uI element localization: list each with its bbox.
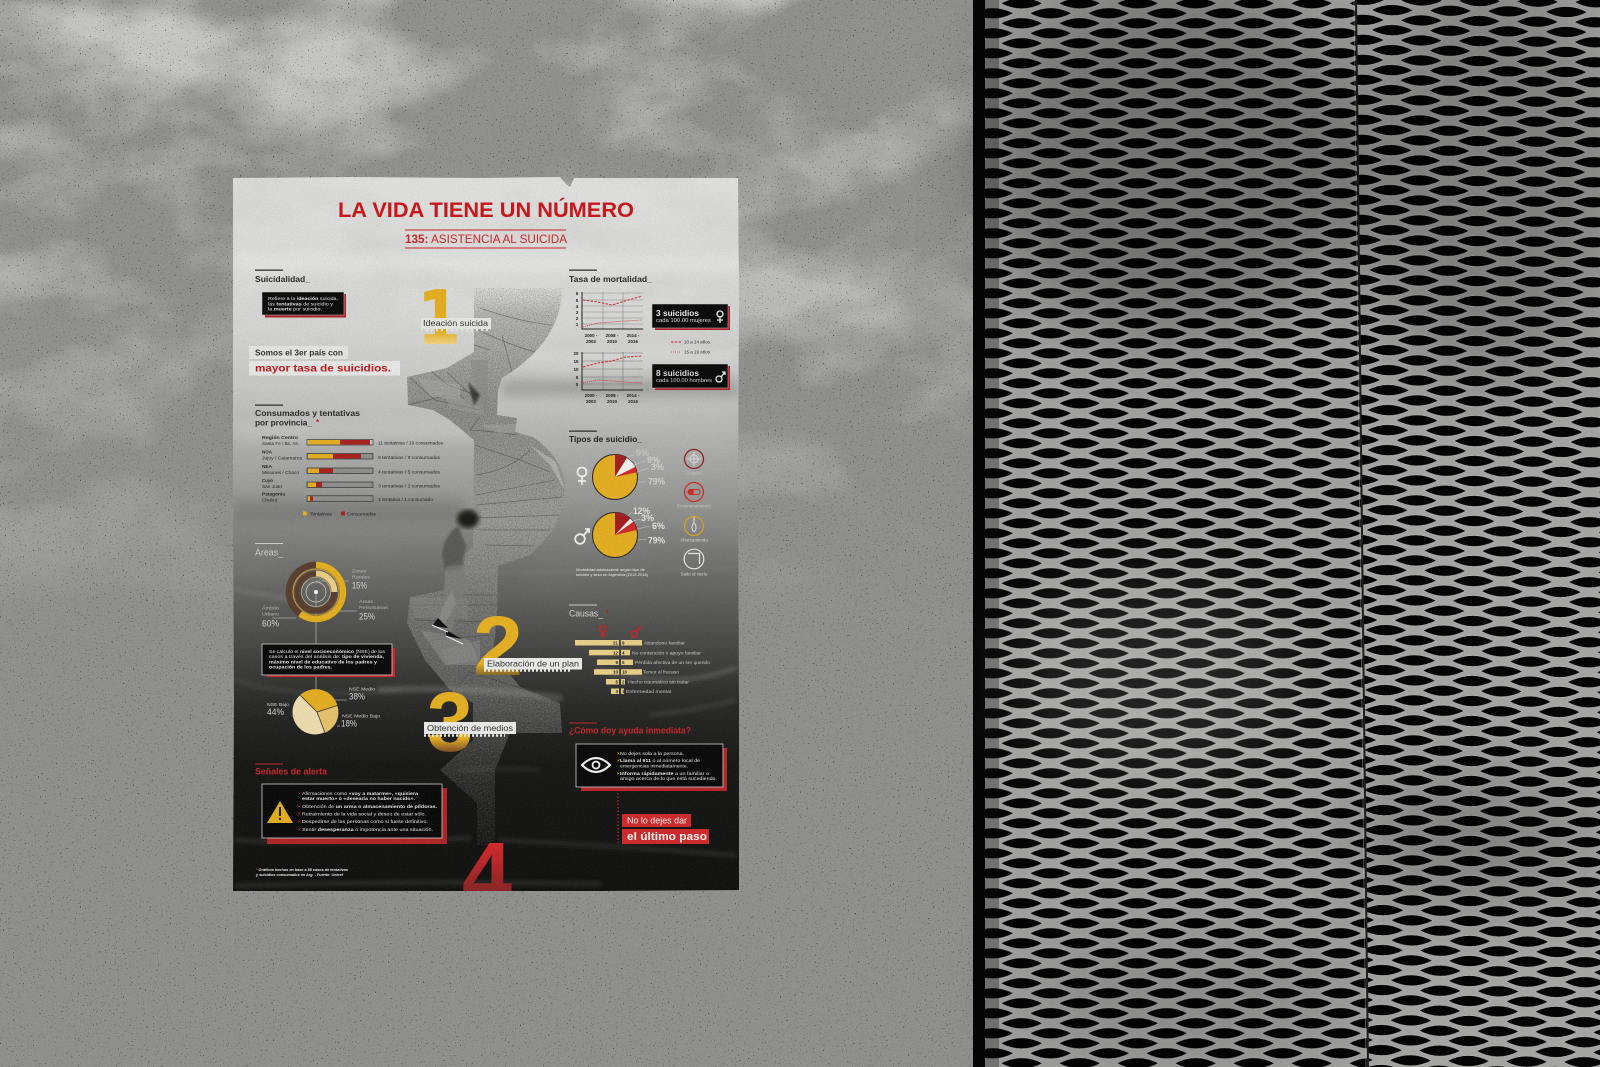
labels: áreas: Rurales <box>352 574 371 580</box>
poster background gradient <box>230 170 745 895</box>
step 3: obtención de medios <box>424 675 516 769</box>
line chart: mujeres: 2014 - <box>627 333 640 338</box>
pie chart: hombres <box>575 506 665 558</box>
caption: mortalidad adolescente: suicidio y sexo en Argentina (2012-2016) <box>576 572 649 577</box>
step 3: obtención de medios: Obtención de medios <box>427 723 513 733</box>
line chart: mujeres: 6 <box>576 291 579 296</box>
diverging bars: causas: 12 <box>613 650 618 655</box>
panel: suicidalidad <box>255 270 346 318</box>
bar chart: provincias: 1 tentativa / 1 consumado <box>378 497 434 502</box>
steps lit faces <box>419 378 460 398</box>
line chart: mujeres: 2000 - <box>585 333 598 338</box>
title: LA VIDA TIENE UN NÚMERO <box>338 198 634 222</box>
subtitle: 135: ASISTENCIA AL SUICIDA <box>405 232 567 246</box>
labels: áreas: Urbano <box>262 612 279 618</box>
pie chart: hombres: 3% <box>641 513 654 523</box>
list: acciones: Informa rápidamente a un familiar o <box>620 771 710 776</box>
box: 8 suicidios hombres: 8 suicidios <box>656 368 699 378</box>
diverging bars: causas: 1 <box>622 689 625 694</box>
bar chart: provincias: Misiones / Chaco <box>262 470 300 475</box>
sky clouds and horizon bands <box>233 373 738 522</box>
line chart: mujeres: 5 <box>576 298 579 303</box>
step 2: elaboración de un plan <box>473 599 582 693</box>
icon: envenenamiento: Envenenamiento <box>677 504 711 508</box>
spiral staircase <box>400 285 570 850</box>
step 2: elaboración de un plan: 2 <box>473 599 523 693</box>
diverging bars: causas: 21 <box>613 640 618 646</box>
line chart: hombres: 2014 - <box>627 393 640 398</box>
list: acciones: × <box>617 771 620 776</box>
diverging bars: causas: 4 <box>622 650 625 655</box>
labels: NSE <box>267 686 380 728</box>
legend: grupos de edad <box>671 340 711 354</box>
callout: no lo dejes dar: el último paso <box>627 831 707 843</box>
diverging bars: causas: Pérdida afectiva de un ser querido <box>635 660 710 666</box>
line chart: mujeres: 2010 <box>607 339 618 344</box>
diverging bars: causas: 5 <box>622 660 625 665</box>
labels: NSE: 38% <box>349 692 365 702</box>
line chart: hombres: 15 <box>573 359 579 364</box>
leader lines <box>272 581 357 690</box>
list: acciones: No dejes sola a la persona. <box>620 751 684 756</box>
footnote: * Gráficos hechos en base a 55 casos de tentativas <box>256 867 349 872</box>
box: 8 suicidios hombres <box>652 364 730 390</box>
line chart: hombres <box>573 351 643 404</box>
line chart: hombres: 2000 - <box>585 393 598 398</box>
panel: causas <box>569 604 710 695</box>
line chart: mujeres: 2016 <box>628 339 639 344</box>
paint streaks <box>236 568 735 886</box>
pie chart: mujeres: 3% <box>651 462 664 472</box>
panel: consumados y tentativas: Consumados y tentativas <box>255 408 360 418</box>
labels: NSE: NSE Bajo <box>267 702 289 708</box>
pie chart: NSE <box>292 689 338 734</box>
pie chart: mujeres <box>578 448 665 500</box>
pie chart: mujeres: 9% <box>636 448 649 458</box>
list: señales: Obtención de un arma o almacenamiento de píldoras. <box>302 804 437 810</box>
panel: consumados y tentativas: por provincia_ <box>255 418 312 428</box>
labels: áreas: 15% <box>352 580 367 590</box>
panel: consumados y tentativas: * <box>316 418 320 427</box>
pie chart: hombres: 79% <box>648 536 665 546</box>
panel: ayuda inmediata: ¿Cómo doy ayuda inmediata? <box>569 726 691 736</box>
panel: señales de alerta: Señales de alerta <box>255 766 327 776</box>
line chart: mujeres: 3 <box>576 310 579 315</box>
labels: NSE: NSE Medio <box>349 686 375 692</box>
box: nivel socioeconómico: Se calculó el nivel socioeconómico (NSE) de los <box>269 649 386 654</box>
box: nivel socioeconómico: casos a través del análisis de: tipo de vivienda, <box>269 654 384 659</box>
line chart: hombres: 2016 <box>628 399 639 404</box>
step 4: 4 <box>462 825 512 925</box>
icon: eye <box>582 758 610 772</box>
list: señales: estar muerto» o «desearía no haber nacido». <box>302 796 415 802</box>
icon: salto al vacío <box>680 549 708 576</box>
icon: disparo: Disparo <box>686 470 702 476</box>
bar chart: provincias: Santa Fe / Bs. As. <box>262 441 299 446</box>
box: nivel socioeconómico: máximo nivel de educativo de los padres y <box>269 660 377 664</box>
diverging bars: causas: 9 <box>615 660 618 665</box>
line chart: hombres: 2008 - <box>606 393 619 398</box>
list: señales: × <box>298 804 301 810</box>
bar chart: provincias: Región Centro <box>262 435 298 440</box>
list: señales: × <box>298 811 301 817</box>
line chart: mujeres: 2 <box>576 316 579 321</box>
labels: áreas: Periurbanas <box>359 605 389 611</box>
metal mesh panels <box>973 0 1600 1067</box>
donut chart: áreas <box>289 565 343 619</box>
person climbing stairs <box>432 510 479 644</box>
caption: mortalidad adolescente: Mortalidad adolescente según tipo de <box>576 567 645 572</box>
pie chart: hombres: 6% <box>652 521 665 531</box>
pie chart: mujeres: 79% <box>648 476 665 486</box>
line chart: mujeres <box>576 291 643 344</box>
bar chart: provincias: Tentativas <box>310 512 333 516</box>
step 1: ideación suicida <box>421 289 491 344</box>
step 1: ideación suicida: 1 <box>417 274 461 362</box>
callout: no lo dejes dar: No lo dejes dar <box>627 816 687 826</box>
list: señales <box>298 791 437 833</box>
diverging bars: causas: 10 <box>613 670 618 675</box>
icon: disparo <box>684 450 704 476</box>
panel: suicidalidad: las tentativas de suicidio y <box>268 302 334 306</box>
list: acciones: amigo acerca de lo que está sucediendo. <box>620 776 717 781</box>
panel: suicidalidad: Refiere a la ideación suicida, <box>268 296 338 301</box>
line chart: hombres: 10 <box>573 367 579 372</box>
labels: NSE: 18% <box>341 718 357 728</box>
bar chart: provincias <box>262 435 444 516</box>
caption: mortalidad adolescente <box>576 567 649 577</box>
bar chart: provincias: NOA <box>262 450 273 454</box>
labels: áreas: Zonas <box>352 568 367 574</box>
callout: mayor tasa de suicidios: Somos el 3er país con <box>255 348 343 358</box>
diverging bars: causas: 5 <box>615 680 618 684</box>
bar chart: provincias: 4 tentativas / 5 consumados <box>378 470 441 474</box>
bar chart: provincias: San Juan <box>262 484 283 489</box>
bar chart: provincias: 9 tentativas / 9 consumados <box>378 455 441 460</box>
panel: consumados y tentativas <box>233 176 740 925</box>
panel: tipos de suicidio: Tipos de suicidio_ <box>569 434 642 444</box>
list: señales: Despedirse de las personas como si fuese definitivo. <box>302 819 428 825</box>
callout: mayor tasa de suicidios: mayor tasa de suicidios. <box>255 362 391 374</box>
box: 3 suicidios mujeres <box>652 304 730 330</box>
pie chart: mujeres: 9% <box>647 455 660 465</box>
line chart: mujeres: 1 <box>576 322 579 327</box>
step 2: elaboración de un plan: Elaboración de un plan <box>487 658 579 668</box>
line chart: mujeres: 2002 <box>586 339 597 344</box>
bar chart: provincias: 11 tentativas / 10 consumados <box>378 440 444 446</box>
icons: género <box>600 626 640 638</box>
panel: causas: * <box>606 610 609 617</box>
line chart: mujeres: 2008 - <box>606 333 619 338</box>
panel: tasa de mortalidad <box>569 270 730 404</box>
list: señales: × <box>298 827 301 833</box>
panel: ayuda inmediata <box>569 722 727 844</box>
list: acciones <box>617 751 717 781</box>
line chart: hombres: 0 <box>576 382 579 387</box>
bar chart: provincias: Consumados <box>347 512 377 516</box>
panel: tasa de mortalidad: Tasa de mortalidad_ <box>569 274 652 284</box>
panel: áreas: Áreas_ <box>255 548 284 558</box>
list: señales: × <box>298 791 301 797</box>
line chart: mujeres: 4 <box>576 304 579 309</box>
icon: ahorcamiento: Ahorcamiento <box>680 538 708 542</box>
list: señales: Sentir desesperanza o impotencia ante una situación. <box>302 827 433 833</box>
labels: áreas: Ámbito <box>262 604 279 612</box>
panel: suicidalidad: la muerte por suicidio. <box>268 306 322 312</box>
list: señales: × <box>298 819 301 825</box>
poster grain <box>233 176 740 892</box>
line chart: hombres: 2010 <box>607 399 618 404</box>
line chart: hombres: 5 <box>576 375 579 380</box>
labels: áreas: 25% <box>359 612 375 622</box>
bar chart: provincias: Chubut <box>262 498 278 502</box>
legend: grupos de edad: 15 a 19 años <box>684 350 711 354</box>
diverging bars: causas: Temor al fracaso <box>643 670 679 676</box>
box: nivel socioeconómico <box>262 644 395 677</box>
diverging bars: causas: 3 <box>615 689 618 694</box>
list: señales: Retraimiento de la vida social y deseo de estar sólo. <box>302 812 426 818</box>
box: 3 suicidios mujeres: cada 100.00 mujeres <box>656 318 712 324</box>
legend: grupos de edad: 10 a 14 años <box>684 340 711 344</box>
diverging bars: causas: Abandono familiar <box>644 640 685 646</box>
icon: ahorcamiento <box>680 516 708 542</box>
pie chart: hombres: 12% <box>633 506 650 516</box>
bar chart: provincias: Cuyo <box>262 478 273 483</box>
labels: NSE: NSE Medio Bajo <box>342 714 380 720</box>
panel: suicidalidad: Suicidalidad_ <box>255 274 310 284</box>
step 1: ideación suicida: Ideación suicida <box>423 319 489 328</box>
diverging bars: causas: Hecho traumático sin tratar <box>628 680 689 686</box>
diverging bars: causas: No contención o apoyo familiar <box>632 650 701 656</box>
labels: NSE: 44% <box>267 707 284 717</box>
list: acciones: emergencias inmediatamente. <box>620 764 688 768</box>
box: 8 suicidios hombres: cada 100.00 hombres <box>656 378 713 384</box>
bar chart: provincias: NEA <box>262 464 273 469</box>
list: acciones: × <box>617 758 620 763</box>
icon: salto al vacío: Salto al vacío <box>680 572 708 576</box>
list: acciones: Llama al 911 o al número local de <box>620 758 700 763</box>
bar chart: provincias: Patagonia <box>262 492 286 496</box>
list: señales: Afirmaciones como «voy a matarme», «quisiera <box>302 791 418 797</box>
icon: warning triangle <box>267 801 293 823</box>
panel: causas: Causas_ <box>569 608 604 618</box>
footnote <box>255 867 349 877</box>
box: nivel socioeconómico: ocupación de los padres. <box>269 664 332 670</box>
diverging bars: causas: Enfermedad mental <box>626 689 671 695</box>
step 3: obtención de medios: 3 <box>427 675 473 769</box>
diverging bars: causas: 9 <box>622 640 625 646</box>
diverging bars: causas: 10 <box>622 670 628 675</box>
footnote: y suicidios consumados en Arg. - Fuente: Unicef <box>255 872 344 877</box>
labels: áreas: 60% <box>262 618 279 628</box>
list: acciones: × <box>617 751 620 756</box>
bar chart: provincias: 3 tentativas / 2 consumados <box>378 484 441 488</box>
line chart: hombres: 20 <box>573 351 579 356</box>
callout: mayor tasa de suicidios <box>249 346 400 376</box>
concrete wall background <box>0 0 975 1067</box>
diverging bars: causas: 2 <box>622 680 625 684</box>
poster <box>230 170 745 925</box>
labels: áreas <box>262 568 389 628</box>
diverging bars: causas <box>575 640 710 695</box>
icon: envenenamiento <box>677 482 711 508</box>
panel: señales de alerta <box>255 764 447 844</box>
labels: áreas: Áreas <box>359 598 374 605</box>
box: 3 suicidios mujeres: 3 suicidios <box>656 308 699 318</box>
panel: áreas <box>255 543 395 734</box>
bar chart: provincias: Jujuy / Catamarca <box>262 456 303 460</box>
panel: tipos de suicidio <box>569 430 711 577</box>
callout: no lo dejes dar <box>622 814 709 844</box>
line chart: hombres: 2002 <box>586 399 597 404</box>
